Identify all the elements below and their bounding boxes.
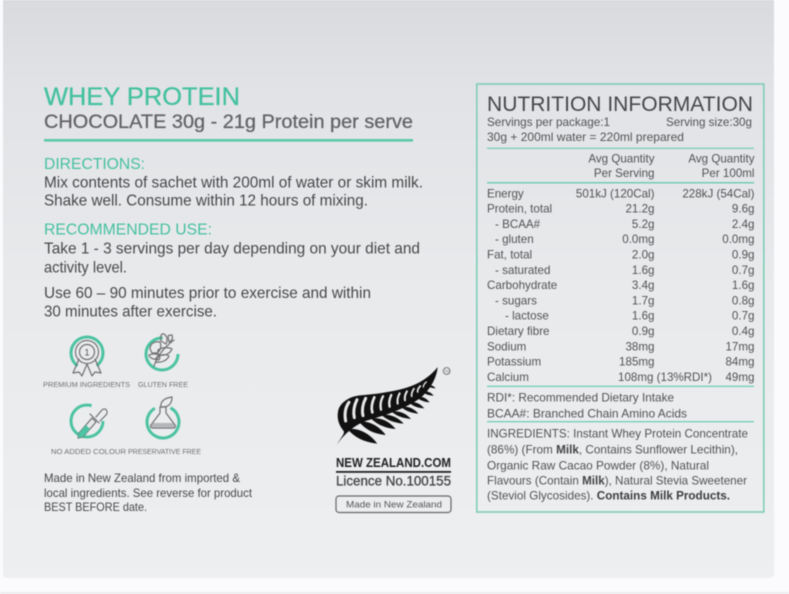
nutrition table rows: 1.6g (732, 279, 754, 292)
nutrition table rows: 2.0g (632, 248, 654, 262)
nutrition table rows: 185mg (619, 356, 654, 369)
ingredients: (86%) (From Milk, Contains Sunflower Lecithin), (487, 443, 738, 456)
directions text: Mix contents of sachet with 200ml of water or skim milk. (44, 174, 423, 192)
nutrition heading: NUTRITION INFORMATION (487, 92, 753, 116)
icon: silver fern logo (337, 367, 450, 444)
footnotes: RDI*: Recommended Dietary Intake (487, 392, 674, 405)
nutrition table rows: 0.9g (632, 325, 654, 338)
serving details (487, 116, 752, 144)
nutrition table rows: 1.7g (632, 294, 654, 307)
nutrition table rows: Sodium (487, 340, 526, 353)
nutrition table rows: 0.4g (732, 325, 754, 338)
table column headers: Avg Quantity (588, 152, 655, 166)
label: no added colour: NO ADDED COLOUR (51, 447, 126, 456)
nutrition table rows: Protein, total (487, 203, 552, 216)
ingredients: Organic Raw Cacao Powder (8%), Natural (487, 459, 709, 472)
fern slits (345, 382, 426, 421)
nutrition table rows: - saturated (495, 264, 550, 277)
nutrition table rows: 84mg (725, 356, 754, 369)
origin note: BEST BEFORE date. (44, 500, 147, 514)
ingredients (487, 428, 748, 502)
logo rule (336, 471, 451, 473)
recommended use text (44, 240, 420, 321)
origin note (44, 471, 253, 514)
bottom strip (0, 592, 789, 594)
nutrition table rows: 108mg (13%RDI*) (618, 371, 712, 384)
nutrition table rows: Fat, total (487, 248, 532, 262)
icon: premium ingredients (65, 331, 109, 376)
nutrition table rows: 21.2g (625, 203, 654, 216)
nutrition table rows: - gluten (495, 233, 534, 246)
nutrition table rows: 49mg (725, 371, 754, 384)
label: preservative free: PRESERVATIVE FREE (128, 447, 201, 456)
made in new zealand badge: Made in New Zealand (346, 500, 442, 510)
label: premium ingredients: PREMIUM INGREDIENTS (43, 380, 130, 389)
nutrition table rows: Energy (487, 187, 524, 200)
nutrition table rows: 2.4g (732, 218, 754, 231)
recommended use text: Take 1 - 3 servings per day depending on your diet and (44, 240, 420, 257)
nutrition table rows: 0.0mg (722, 233, 754, 246)
logo wordmark: NEW ZEALAND.COM (336, 456, 451, 470)
nutrition table rows: - lactose (505, 310, 549, 323)
serving details: Servings per package:1 (487, 116, 610, 129)
table column headers (588, 152, 755, 180)
directions text: Shake well. Consume within 12 hours of mixing. (44, 192, 368, 210)
ingredients: INGREDIENTS: Instant Whey Protein Concentrate (487, 428, 748, 441)
footnotes: BCAA#: Branched Chain Amino Acids (487, 407, 687, 420)
origin note: Made in New Zealand from imported & (44, 471, 240, 485)
made in new zealand badge (336, 496, 451, 512)
licence number: Licence No.100155 (336, 474, 451, 488)
icon: no added colour (71, 405, 107, 438)
nutrition table rows: Dietary fibre (487, 325, 550, 338)
recommended use text: 30 minutes after exercise. (44, 304, 217, 321)
nutrition table rows: - sugars (495, 294, 537, 307)
subtitle: CHOCOLATE 30g - 21g Protein per serve (44, 111, 413, 133)
nutrition table rows: 0.0mg (622, 233, 654, 246)
serving details: Serving size:30g (666, 116, 752, 129)
icon: silver fern logo: TM (444, 369, 449, 373)
ingredients: Flavours (Contain Milk), Natural Stevia Sweetener (487, 474, 747, 487)
nutrition table rows: 17mg (725, 340, 754, 353)
table column headers: Per Serving (594, 167, 654, 180)
nutrition table rows (487, 187, 755, 384)
icon: preservative free (141, 397, 185, 444)
title divider (44, 139, 413, 142)
fern lower leaflets (348, 385, 436, 444)
trademark (443, 368, 450, 374)
panel: nutrition information (477, 84, 764, 512)
origin note: local ingredients. See reverse for product (44, 486, 253, 500)
serving details: 30g + 200ml water = 220ml prepared (487, 131, 684, 144)
footnotes (487, 392, 687, 420)
nutrition table rows: Carbohydrate (487, 279, 557, 292)
nutrition table rows: 1.6g (632, 310, 654, 323)
nutrition table rows: Calcium (487, 371, 529, 384)
nutrition table rows: 0.8g (732, 294, 754, 307)
directions text (44, 174, 423, 210)
nutrition table rows: 228kJ (54Cal) (682, 187, 755, 200)
title: WHEY PROTEIN (44, 84, 240, 111)
nutrition table rows: 9.6g (732, 203, 754, 216)
nutrition table rows: 5.2g (632, 218, 654, 231)
nutrition table rows: 1.6g (632, 264, 654, 277)
recommended use heading: RECOMMENDED USE: (44, 221, 212, 238)
recommended use text: activity level. (44, 259, 127, 276)
icon: premium ingredients: 1 (84, 348, 90, 358)
label: gluten free: GLUTEN FREE (138, 380, 188, 389)
nutrition table rows: 501kJ (120Cal) (576, 187, 655, 200)
icon: gluten free (146, 334, 178, 370)
nutrition table rows: 0.9g (732, 248, 754, 262)
nutrition table rows: 0.7g (732, 264, 754, 277)
nutrition table rows: 38mg (625, 340, 654, 353)
ingredients: (Steviol Glycosides). Contains Milk Products. (487, 489, 730, 502)
table column headers: Per 100ml (702, 167, 754, 180)
fern upper frond (337, 367, 438, 444)
table column headers: Avg Quantity (688, 152, 755, 166)
nutrition table rows: 0.7g (732, 310, 754, 323)
nutrition table rows: Potassium (487, 356, 541, 369)
recommended use text: Use 60 – 90 minutes prior to exercise and within (44, 285, 371, 302)
directions heading: DIRECTIONS: (44, 156, 145, 173)
nutrition table rows: - BCAA# (495, 218, 541, 231)
nutrition table rows: 3.4g (632, 279, 654, 292)
